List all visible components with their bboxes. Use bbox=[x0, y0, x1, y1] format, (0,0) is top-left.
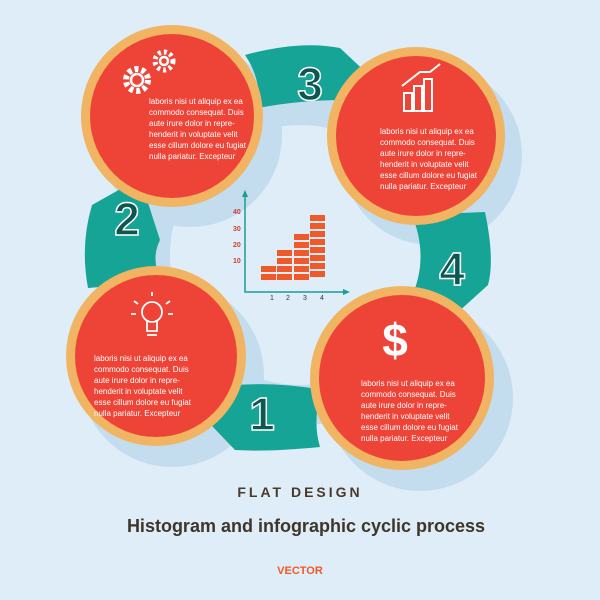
background ring bbox=[150, 105, 450, 405]
text: henderit in voluptate velit bbox=[361, 412, 450, 421]
arrow 1: 1 bbox=[249, 388, 275, 440]
title: Histogram and infographic cyclic process bbox=[127, 516, 485, 536]
histogram: 2 bbox=[286, 295, 290, 302]
arrow 3 bbox=[245, 45, 372, 110]
text: commodo consequat. Duis bbox=[149, 108, 244, 117]
histogram: 30 bbox=[233, 226, 241, 233]
text: esse cillum dolore eu fugiat bbox=[149, 141, 247, 150]
histogram: 10 bbox=[233, 258, 241, 265]
text: aute irure dolor in repre- bbox=[361, 401, 447, 410]
histogram: 20 bbox=[233, 242, 241, 249]
arrow 4 bbox=[410, 212, 491, 342]
text: laboris nisi ut aliquip ex ea bbox=[380, 127, 474, 136]
histogram: 1 bbox=[270, 295, 274, 302]
text: laboris nisi ut aliquip ex ea bbox=[94, 354, 188, 363]
arrow 2: 2 bbox=[114, 193, 140, 245]
histogram: 3 bbox=[303, 295, 307, 302]
text: commodo consequat. Duis bbox=[361, 390, 456, 399]
circle bottom-left bbox=[66, 266, 246, 446]
text: aute irure dolor in repre- bbox=[380, 149, 466, 158]
text: commodo consequat. Duis bbox=[380, 138, 475, 147]
text: nulla pariatur. Excepteur bbox=[94, 409, 181, 418]
text: esse cillum dolore eu fugiat bbox=[380, 171, 478, 180]
text: laboris nisi ut aliquip ex ea bbox=[149, 97, 243, 106]
text: henderit in voluptate velit bbox=[380, 160, 469, 169]
text: aute irure dolor in repre- bbox=[94, 376, 180, 385]
circle top-right bbox=[327, 47, 505, 225]
text: nulla pariatur. Excepteur bbox=[380, 182, 467, 191]
icon: bulb bbox=[131, 292, 173, 335]
arrow 3: 3 bbox=[297, 58, 323, 110]
arrow 2 bbox=[85, 178, 162, 288]
text: esse cillum dolore eu fugiat bbox=[361, 423, 459, 432]
icon: dollar: $ bbox=[382, 314, 408, 366]
circle bottom-right bbox=[310, 286, 494, 470]
text: nulla pariatur. Excepteur bbox=[361, 434, 448, 443]
icon: chart up bbox=[402, 64, 440, 111]
arrow 4: 4 bbox=[439, 243, 465, 295]
icon: gears bbox=[126, 52, 173, 91]
histogram: 4 bbox=[320, 295, 324, 302]
circle top-left bbox=[81, 25, 263, 207]
text: henderit in voluptate velit bbox=[94, 387, 183, 396]
text: aute irure dolor in repre- bbox=[149, 119, 235, 128]
text: laboris nisi ut aliquip ex ea bbox=[361, 379, 455, 388]
text: nulla pariatur. Excepteur bbox=[149, 152, 236, 161]
text: henderit in voluptate velit bbox=[149, 130, 238, 139]
histogram: 40 bbox=[233, 209, 241, 216]
vector label: VECTOR bbox=[277, 565, 323, 577]
shadows bbox=[80, 43, 522, 491]
subtitle: flat design: FLAT DESIGN bbox=[237, 484, 363, 500]
arrow 1 bbox=[192, 384, 322, 451]
text: esse cillum dolore eu fugiat bbox=[94, 398, 192, 407]
text: commodo consequat. Duis bbox=[94, 365, 189, 374]
histogram bbox=[233, 190, 350, 302]
